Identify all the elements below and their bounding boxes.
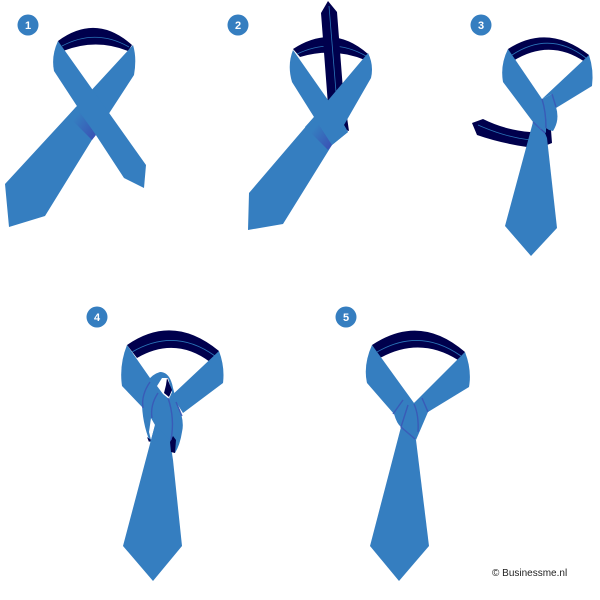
loop xyxy=(142,372,183,453)
blade shading xyxy=(305,117,332,150)
badge 4 xyxy=(86,306,108,328)
narrow blade xyxy=(53,41,146,188)
badge 2 xyxy=(228,14,248,36)
wide blade xyxy=(5,45,135,227)
copyright: © Businessme.nl xyxy=(492,568,567,579)
badge 2: 2 xyxy=(235,20,241,32)
step 4 xyxy=(86,306,224,581)
badge 3: 3 xyxy=(478,20,484,32)
narrow end pieces xyxy=(147,436,176,453)
neck band front xyxy=(290,50,348,145)
fold lines xyxy=(393,398,428,439)
step 3 xyxy=(470,14,593,256)
left band xyxy=(502,49,546,133)
blade shading xyxy=(68,107,96,140)
badge 3 xyxy=(470,14,492,36)
narrow end behind xyxy=(321,1,349,131)
left band xyxy=(121,345,150,408)
step 5 xyxy=(336,306,470,581)
right band xyxy=(414,352,470,412)
fold lines xyxy=(533,94,556,133)
badge 4: 4 xyxy=(94,312,101,324)
main blade xyxy=(123,425,182,581)
collar xyxy=(58,28,132,51)
main blade xyxy=(370,427,429,581)
right band xyxy=(169,351,224,413)
left band xyxy=(366,345,414,414)
white slit xyxy=(149,418,155,440)
right band xyxy=(542,55,593,108)
fold lines xyxy=(143,382,182,440)
hole dark xyxy=(164,378,172,397)
main blade xyxy=(505,122,557,256)
badge 5: 5 xyxy=(343,312,349,324)
collar xyxy=(127,330,219,362)
collar xyxy=(508,37,589,62)
collar xyxy=(372,331,465,360)
badge 1: 1 xyxy=(25,20,31,32)
wide blade xyxy=(248,53,372,230)
badge 5 xyxy=(336,306,356,328)
knot xyxy=(394,398,428,440)
narrow end strap xyxy=(472,119,552,147)
step 2 xyxy=(228,1,372,230)
step 1 xyxy=(5,14,146,227)
collar xyxy=(293,37,368,60)
badge 1 xyxy=(18,14,38,36)
loop xyxy=(542,94,557,131)
